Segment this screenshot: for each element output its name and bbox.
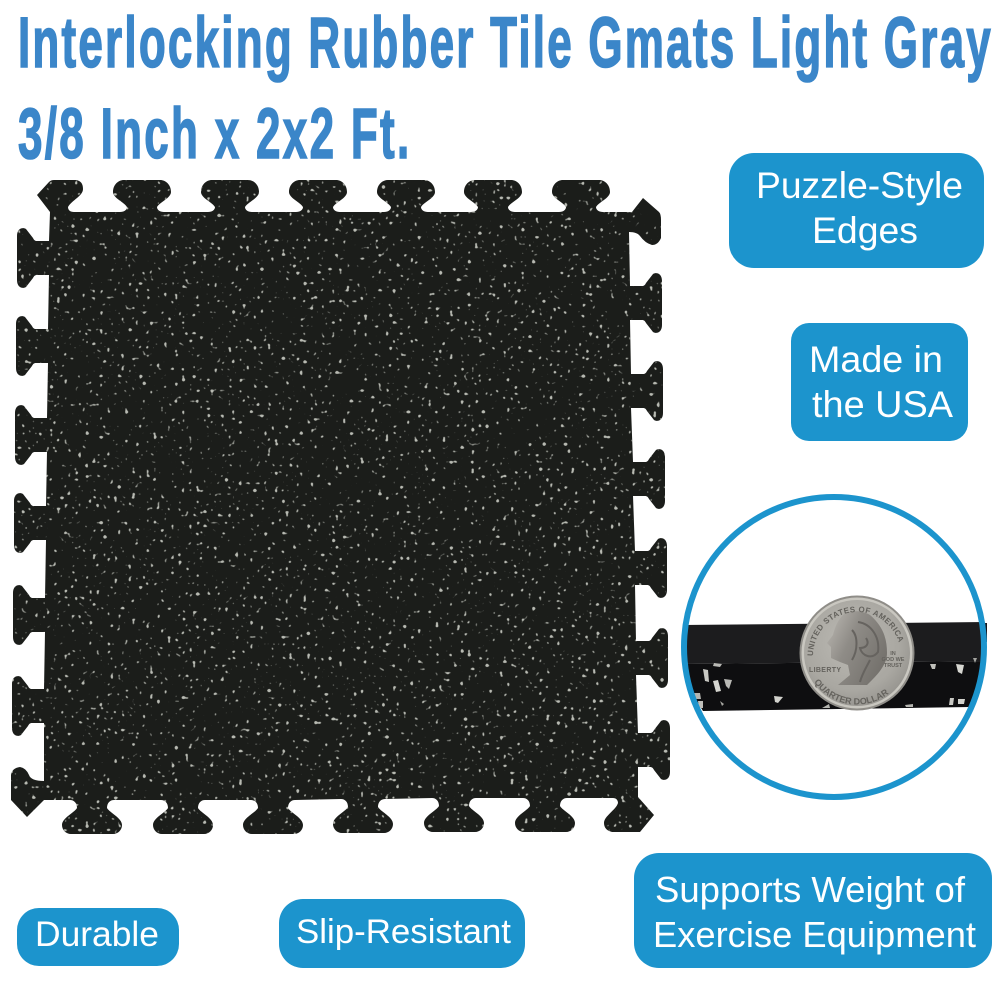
mat edge strip <box>680 622 990 711</box>
callout: supports weight of exercise equipment <box>634 853 992 968</box>
callout: puzzle-style edges: Edges <box>812 210 918 251</box>
callout: made in the USA <box>791 323 968 441</box>
callout: supports weight of exercise equipment: Exercise Equipment <box>653 914 976 955</box>
callout: puzzle-style edges <box>729 153 984 268</box>
quarter coin: IN <box>890 651 896 657</box>
callout: supports weight of exercise equipment: Supports Weight of <box>655 869 966 910</box>
callout: puzzle-style edges: Puzzle-Style <box>756 165 963 206</box>
coin inscription: UNITED STATES OF AMERICA <box>808 606 904 656</box>
quarter coin: QUARTER DOLLAR <box>815 680 889 704</box>
title: Interlocking Rubber Tile Gmats Light Gray <box>18 3 991 83</box>
title <box>18 3 991 174</box>
quarter coin: TRUST <box>884 663 903 669</box>
hair curls <box>852 622 878 682</box>
callout: made in the USA: the USA <box>812 384 953 425</box>
ring <box>684 497 984 797</box>
quarter coin: GOD WE <box>882 657 905 663</box>
quarter coin: LIBERTY <box>809 667 841 674</box>
quarter coin <box>800 596 914 710</box>
callout: durable <box>17 908 179 966</box>
title: 3/8 Inch x 2x2 Ft. <box>18 94 409 174</box>
callout: slip-resistant: Slip-Resistant <box>296 913 511 951</box>
rubber tile with puzzle edges <box>0 170 680 850</box>
mat end sliver <box>981 623 987 642</box>
head of Washington <box>827 611 887 685</box>
callout: slip-resistant <box>279 899 525 968</box>
callout: made in the USA: Made in <box>809 339 943 380</box>
callout: durable: Durable <box>35 915 159 954</box>
thickness inset: mat edge with quarter <box>681 494 987 800</box>
